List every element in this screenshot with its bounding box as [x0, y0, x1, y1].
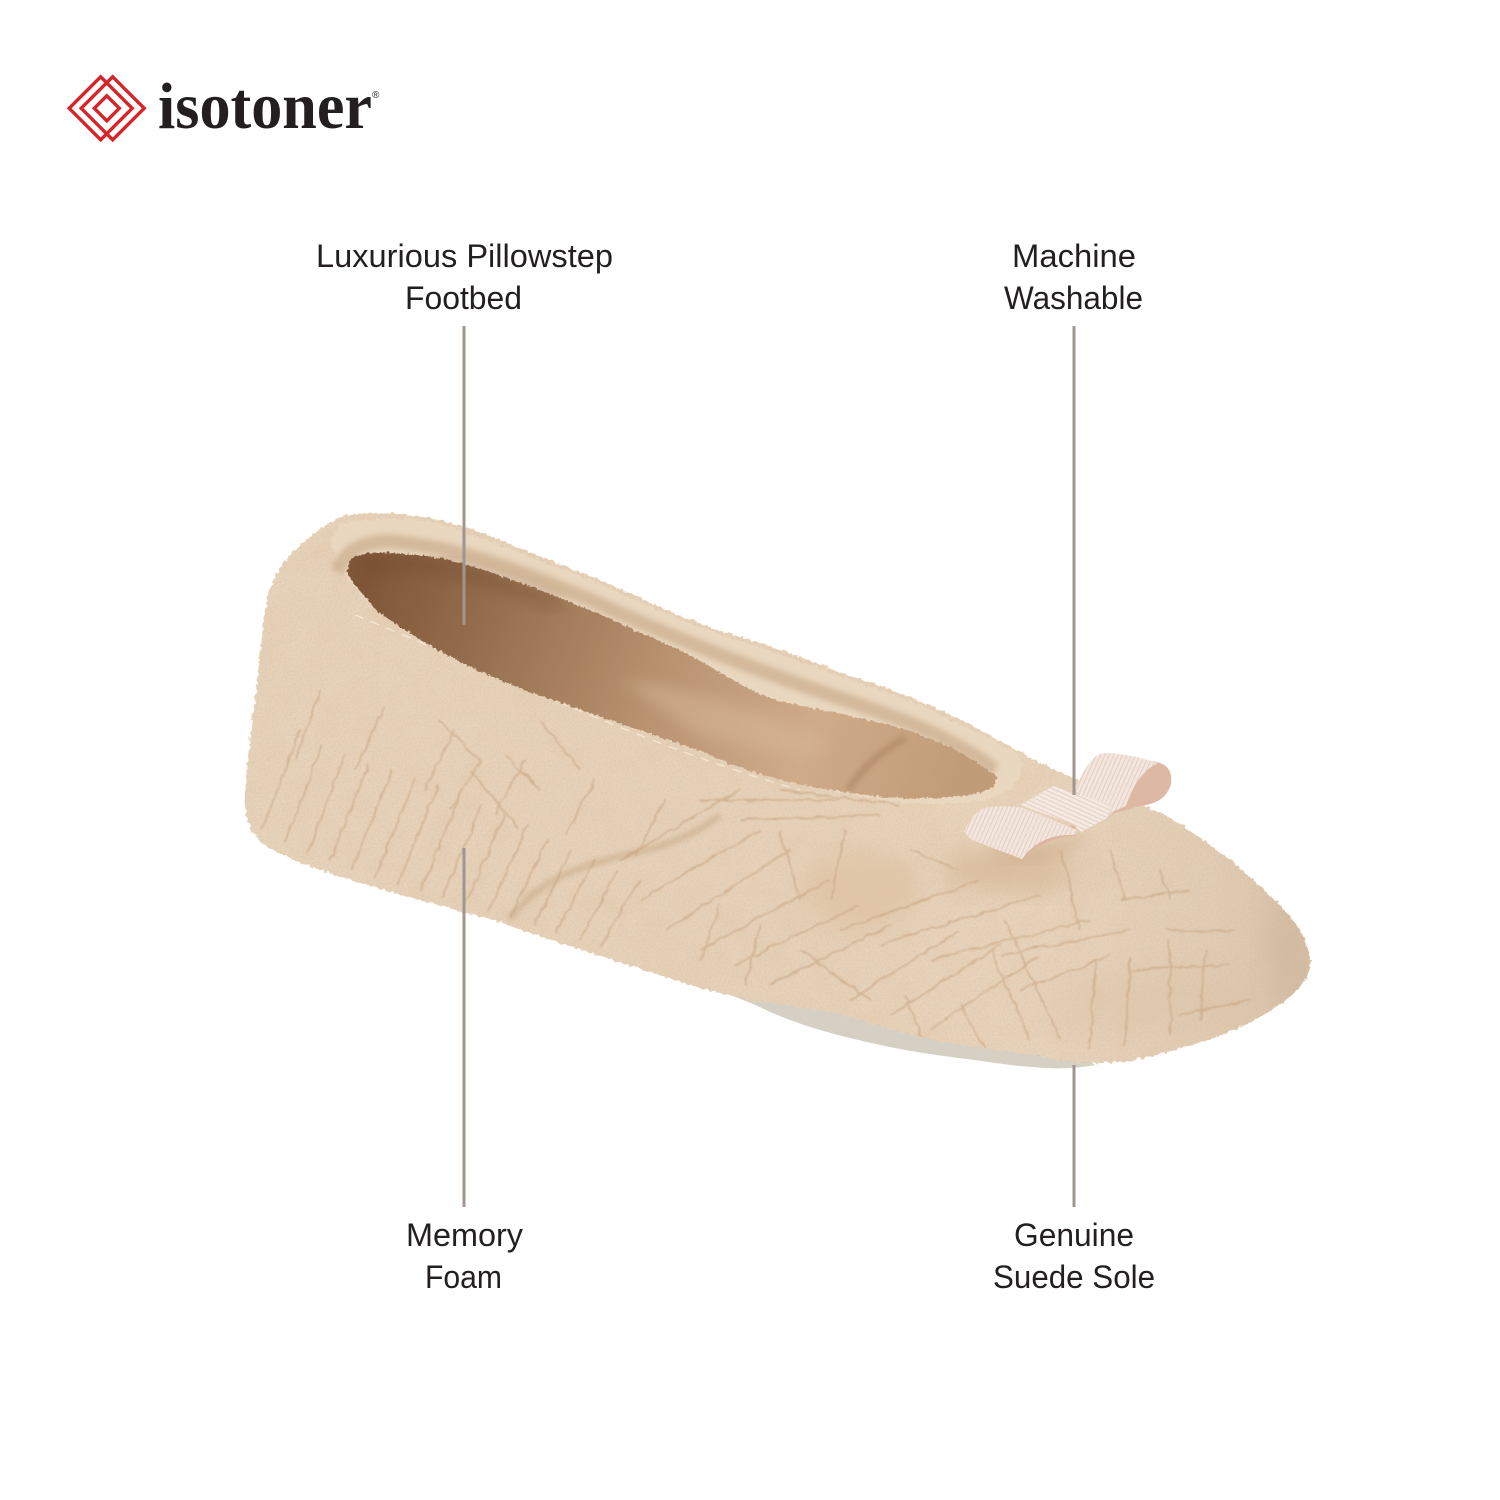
label: Luxurious Pillowstep Footbed: Footbed [405, 280, 522, 316]
left loop [964, 806, 1077, 859]
line: footbed [462, 326, 466, 625]
label: Machine Washable: Machine [1012, 238, 1136, 274]
right loop [1074, 753, 1158, 815]
icon: red nested diamonds [69, 77, 144, 140]
stitching [355, 615, 800, 790]
footbed opening [347, 552, 997, 798]
bow [964, 753, 1171, 861]
right loop inner [1112, 761, 1171, 814]
slipper upper [245, 513, 1310, 1063]
label: Genuine Suede Sole: Genuine [1014, 1217, 1134, 1253]
label: Memory Foam: Memory [406, 1217, 523, 1253]
wrinkle fold [510, 815, 720, 918]
footbed plush shading [360, 564, 905, 790]
fuzzy rim [330, 519, 1022, 804]
sole [700, 986, 1095, 1068]
wordmark: isotoner [158, 70, 372, 143]
label: Memory Foam [406, 1217, 523, 1295]
line: memory foam [462, 848, 466, 1207]
label: Memory Foam: Foam [425, 1259, 502, 1295]
left loop underside [1020, 826, 1076, 858]
callout lines [462, 326, 1076, 1207]
bow shadow [985, 835, 1095, 861]
bow knot [1020, 786, 1113, 832]
slipper photo illustration [240, 505, 1315, 1075]
label: Genuine Suede Sole [993, 1217, 1155, 1295]
line: machine washable [1072, 326, 1076, 795]
wordmark: ® [372, 90, 380, 101]
shading and herringbone texture [240, 505, 1315, 1075]
line: suede sole [1072, 1065, 1076, 1207]
label: Machine Washable: Washable [1004, 280, 1143, 316]
logo: isotoner [69, 70, 380, 143]
label: Genuine Suede Sole: Suede Sole [993, 1259, 1155, 1295]
rim inner shadow [338, 542, 995, 770]
label: Luxurious Pillowstep Footbed: Luxurious Pillowstep [316, 238, 613, 274]
label: Machine Washable [1004, 238, 1143, 316]
label: Luxurious Pillowstep Footbed [316, 238, 613, 316]
